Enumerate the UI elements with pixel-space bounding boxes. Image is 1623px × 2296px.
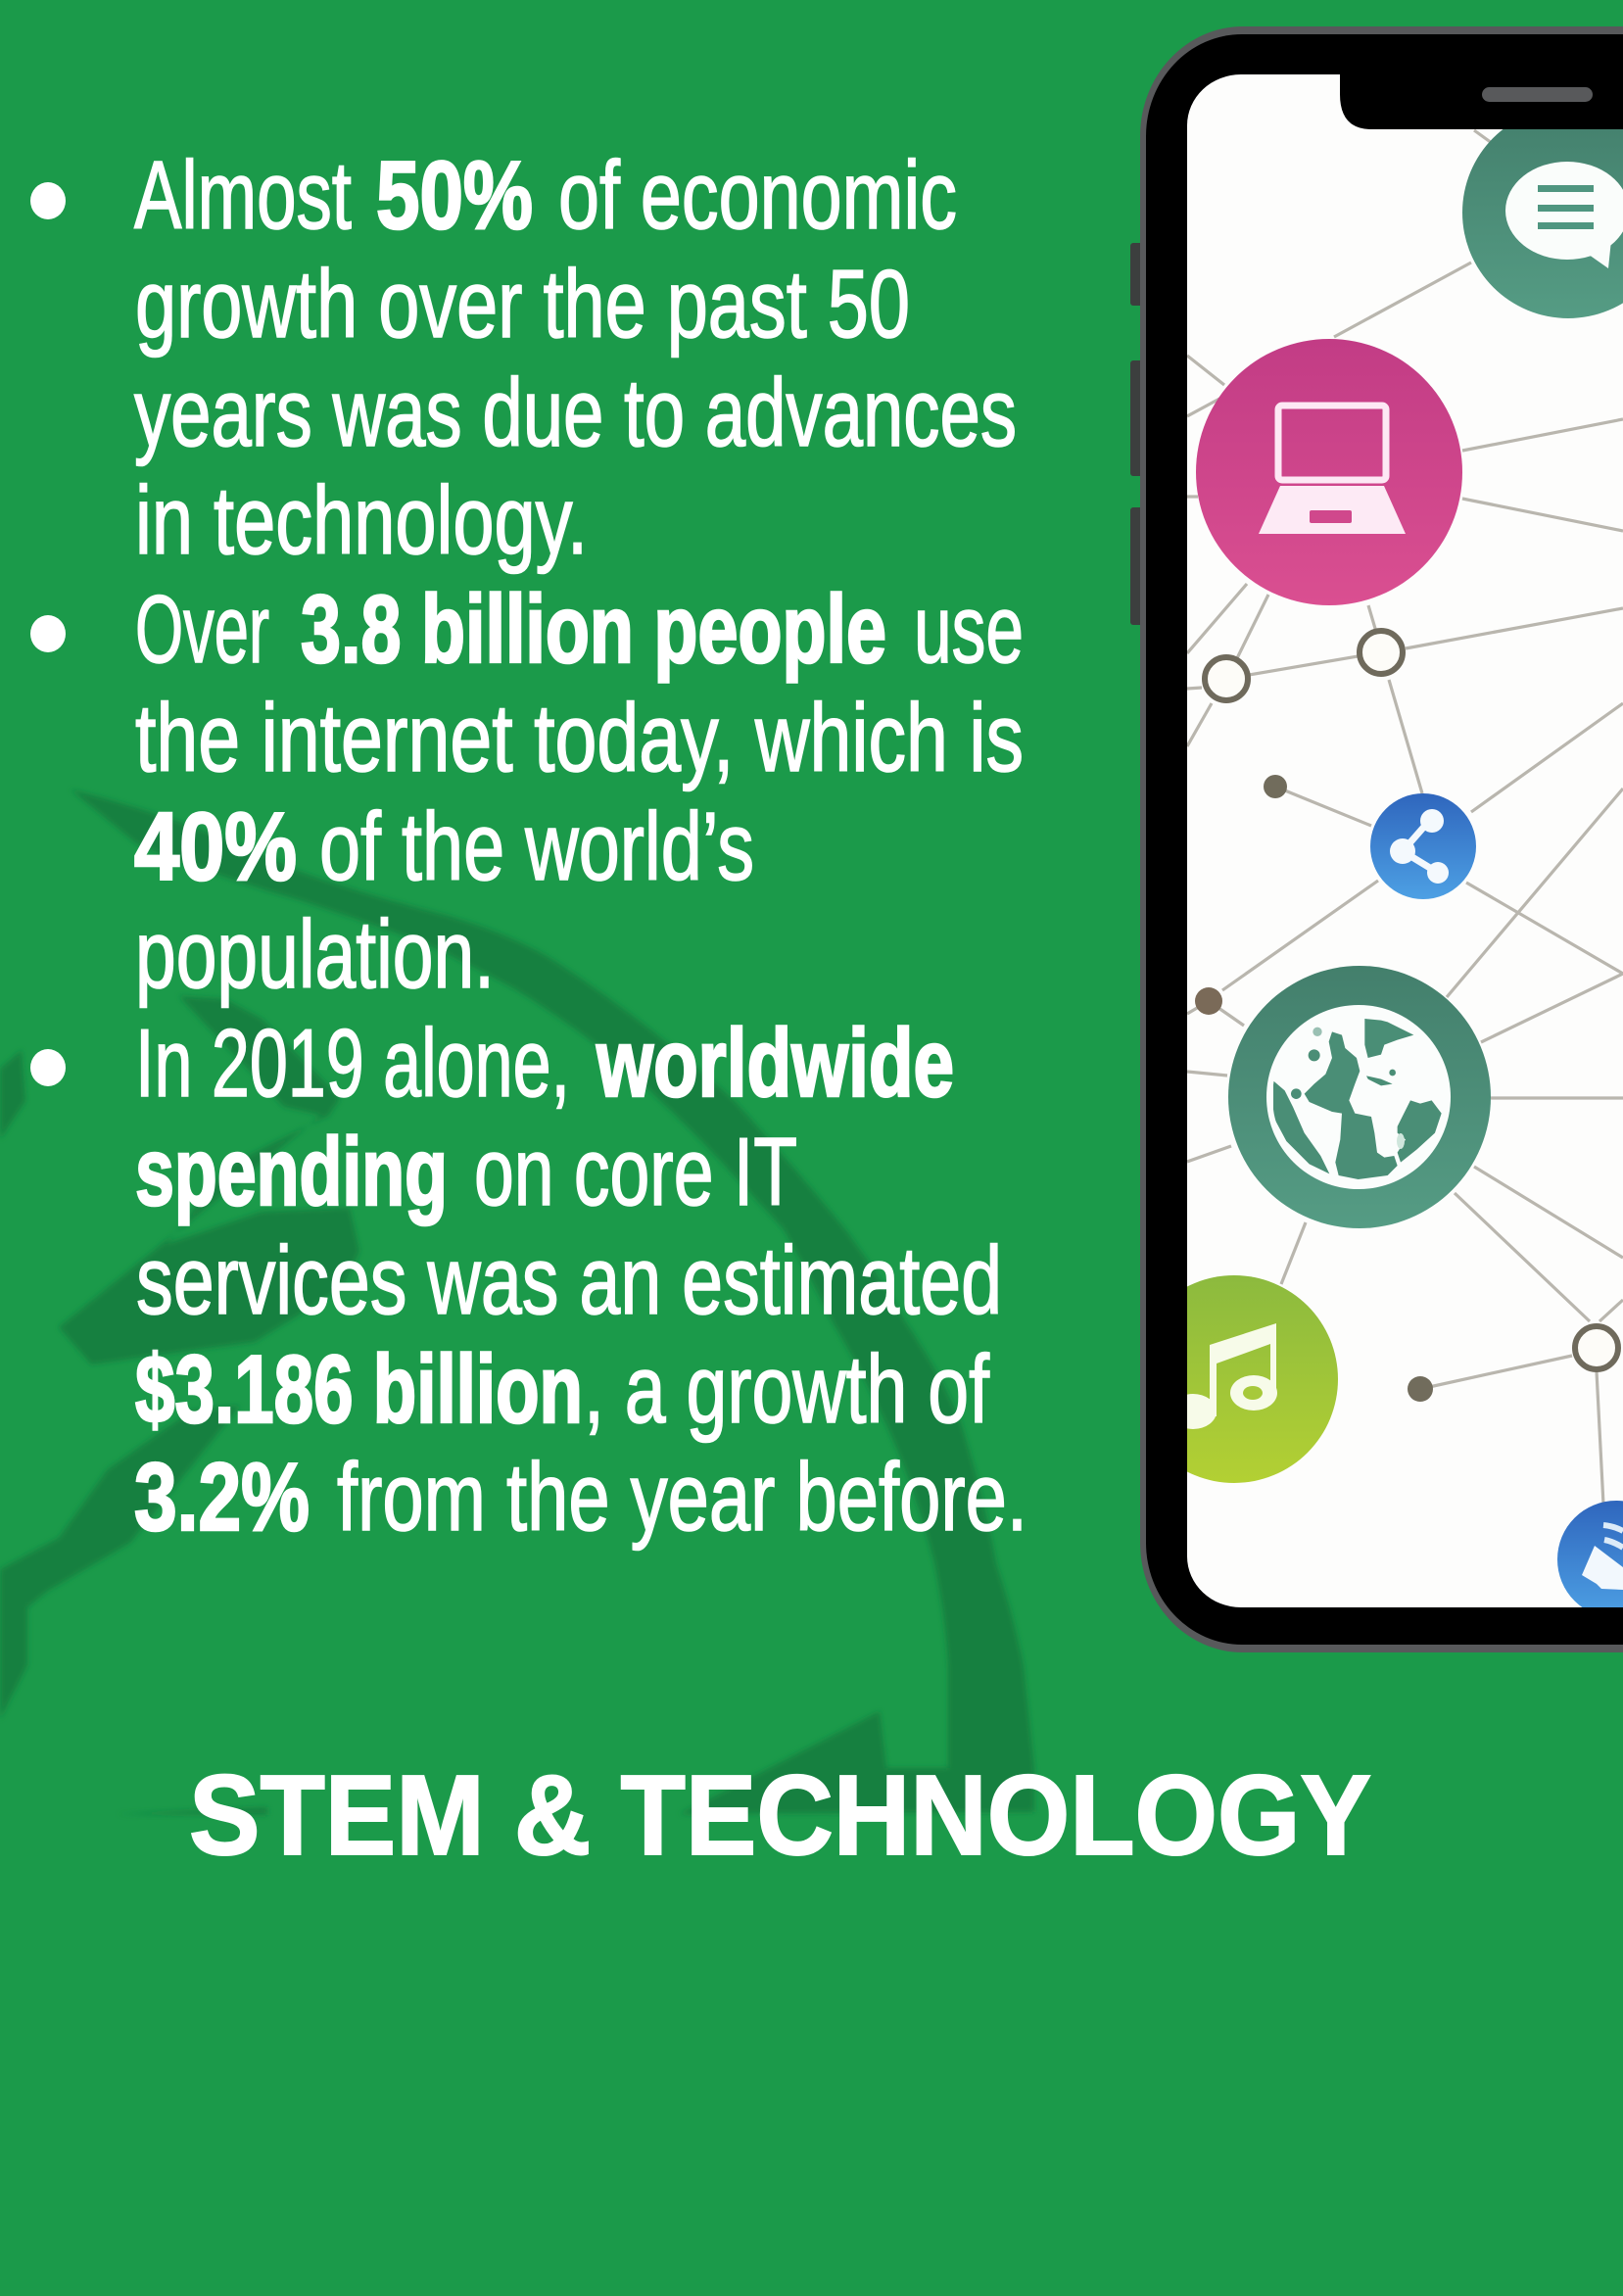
icon: laptop circle — [1196, 339, 1462, 605]
bullet 1: economic growth: in technology. — [135, 466, 588, 574]
network dots — [1195, 775, 1433, 1402]
bullet 1: economic growth: years was due to advances — [134, 359, 1017, 466]
bullet 1: economic growth: 50% — [376, 141, 533, 249]
bullet 3: IT spending: In 2019 alone, — [135, 1009, 570, 1117]
phone speaker pill — [1482, 87, 1593, 102]
bullet 2: internet users: use — [914, 575, 1024, 683]
phone side buttons — [1130, 243, 1144, 625]
phone mockup — [1130, 26, 1623, 1652]
icon: globe circle — [1228, 966, 1491, 1228]
bullet 1: economic growth: growth over the past 50 — [135, 250, 910, 358]
network lines — [1187, 130, 1623, 1505]
bullet 2: internet users: 3.8 billion people — [301, 575, 886, 683]
bullet 3: IT spending: spending — [135, 1118, 448, 1225]
icon: share circle — [1370, 793, 1476, 899]
bullet 3: IT spending — [30, 1009, 1027, 1551]
phone screen — [1187, 74, 1623, 1607]
bullet 3: IT spending: from the year before. — [337, 1443, 1027, 1551]
icon: music note circle — [1187, 1275, 1338, 1483]
network hollow nodes — [1205, 631, 1618, 1369]
bullet 2: internet users — [30, 575, 1024, 1008]
bullet 2: internet users: the internet today, which is — [135, 684, 1024, 791]
bullet 2: internet users: of the world’s — [319, 792, 754, 900]
watermark: recycling arrows logo — [0, 789, 1034, 1815]
icon: speaker circle — [1557, 1501, 1623, 1618]
bullet 1: economic growth: of economic — [558, 141, 957, 249]
bullet 1: economic growth — [30, 141, 1017, 574]
bullet 3: IT spending: , a growth of — [584, 1335, 990, 1443]
bullet 2: internet users: population. — [135, 900, 495, 1008]
icon: chat bubble circle — [1462, 129, 1623, 318]
bullet 2: internet users: Over — [135, 575, 269, 683]
bullet 3: IT spending: 3.2% — [134, 1443, 310, 1551]
text block: statistics — [30, 141, 1027, 1551]
bullet 3: IT spending: worldwide — [596, 1009, 954, 1117]
phone body — [1140, 26, 1623, 1652]
bullet 1: economic growth: Almost — [134, 141, 352, 249]
bullet 2: internet users: 40% — [134, 792, 297, 900]
phone notch — [1334, 69, 1623, 129]
bullet 3: IT spending: $3.186 billion — [135, 1335, 583, 1443]
bullet 3: IT spending: on core IT — [474, 1118, 797, 1225]
bullet 3: IT spending: services was an estimated — [136, 1226, 1002, 1334]
title: STEM & TECHNOLOGY — [189, 1751, 1371, 1879]
